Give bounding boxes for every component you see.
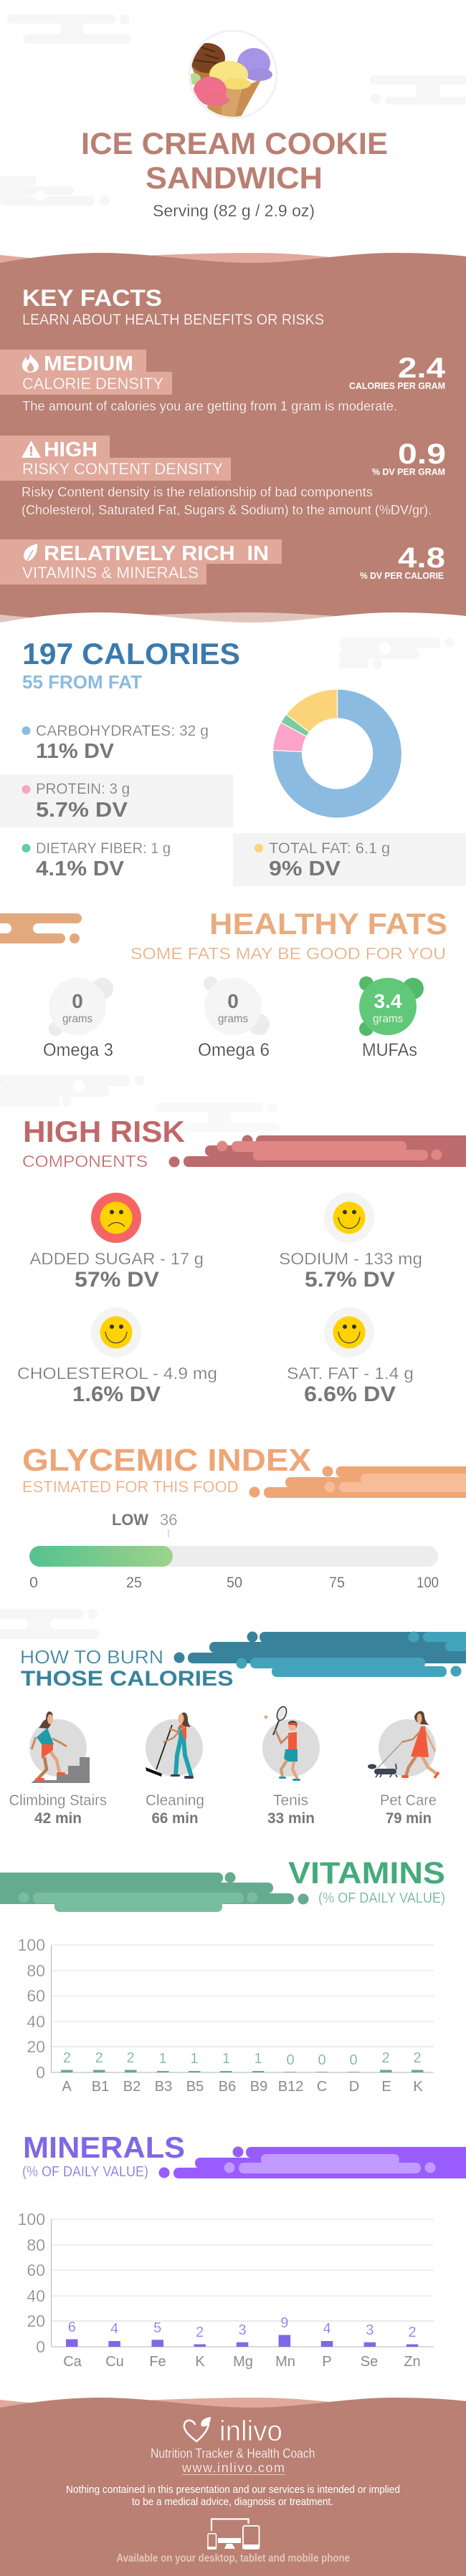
bar chart: minerals: Ca <box>63 2354 82 2370</box>
bar chart: vitamins: K <box>413 2079 423 2095</box>
bar chart: vitamins: 0 <box>349 2052 358 2068</box>
bar chart: minerals: 4 <box>110 2321 118 2337</box>
bar chart: minerals: 3 <box>238 2322 247 2338</box>
bar chart: vitamins <box>18 1936 434 2095</box>
icon: tennis player <box>264 1706 300 1781</box>
subheading: SOME FATS MAY BE GOOD FOR YOU <box>130 944 446 963</box>
stat: omega 6: grams <box>218 1013 248 1025</box>
fact: calorie density: CALORIE DENSITY <box>22 375 163 393</box>
bar chart: vitamins: 80 <box>27 1961 45 1980</box>
bar chart: vitamins: 1 <box>190 2051 199 2067</box>
fact: calorie density <box>0 350 446 413</box>
legend: protein <box>0 774 234 827</box>
gauge scale: 50 <box>227 1575 242 1591</box>
icon: warning triangle <box>22 441 41 458</box>
bar chart: minerals: 9 <box>280 2315 288 2331</box>
decorative cloud: centre <box>155 1102 280 1132</box>
fact: risky content density: HIGH <box>44 438 98 461</box>
disclaimer <box>66 2484 400 2508</box>
bar chart: vitamins: 1 <box>158 2051 167 2067</box>
icon: person sweeping <box>146 1713 194 1779</box>
legend: dietary fiber: 4.1% DV <box>36 857 125 880</box>
bar chart: vitamins: 20 <box>27 2037 45 2056</box>
activity: climbing stairs: 42 min <box>34 1810 82 1827</box>
disclaimer: to be a medical advice, diagnosis or treatment. <box>132 2496 333 2508</box>
item: sodium: 5.7% DV <box>305 1268 395 1292</box>
bar chart: minerals: K <box>195 2354 205 2370</box>
decorative cloud: left <box>0 1075 145 1107</box>
bar chart: vitamins: B5 <box>186 2079 204 2095</box>
icon: woman climbing stairs <box>32 1711 90 1783</box>
decorative stripes <box>0 1873 308 1912</box>
item: cholesterol: CHOLESTEROL - 4.9 mg <box>17 1364 217 1383</box>
stat: omega 3: Omega 3 <box>43 1040 113 1060</box>
panel: key facts <box>0 253 466 630</box>
legend: total fat: 9% DV <box>269 857 341 880</box>
bar chart: vitamins: 60 <box>27 1986 45 2005</box>
availability note: Available on your desktop, tablet and mobile phone <box>116 2552 350 2565</box>
serving size: Serving (82 g / 2.9 oz) <box>153 201 315 220</box>
panel: high risk components <box>17 1115 466 1406</box>
fact: risky content density: (Cholesterol, Saturated Fat, Sugars & Sodium) to the amount (%DV/gr). <box>22 503 432 517</box>
panel: glycemic index <box>22 1443 466 1591</box>
bar chart: minerals: 4 <box>323 2321 331 2337</box>
bar chart: vitamins: D <box>349 2079 359 2095</box>
bar chart: minerals: 5 <box>153 2320 161 2336</box>
item: added sugar: 57% DV <box>75 1268 159 1292</box>
icon: smiling face <box>324 1193 374 1243</box>
activity: cleaning: Cleaning <box>146 1792 204 1809</box>
item: saturated fat: 6.6% DV <box>304 1383 396 1406</box>
legend: protein: 5.7% DV <box>36 799 128 822</box>
decorative cloud: left <box>0 176 110 206</box>
item: cholesterol <box>17 1307 217 1406</box>
bar chart: vitamins: B6 <box>219 2079 236 2095</box>
bar chart: minerals: 3 <box>366 2322 374 2338</box>
legend: dietary fiber: DIETARY FIBER: 1 g <box>36 840 171 857</box>
stat: mufas: 3.4 <box>374 990 402 1012</box>
bar chart: vitamins: B2 <box>123 2079 141 2095</box>
subheading: (% OF DAILY VALUE) <box>318 1890 445 1906</box>
gauge value: LOW <box>112 1511 148 1529</box>
activity: pet care <box>368 1711 439 1827</box>
fact: risky content density: Risky Content density is the relationship of bad components <box>22 485 373 499</box>
bar chart: vitamins: B3 <box>155 2079 172 2095</box>
stat: mufas: grams <box>373 1013 403 1025</box>
bar chart: vitamins: E <box>381 2079 391 2095</box>
heading: glycemic index: GLYCEMIC INDEX <box>22 1443 311 1478</box>
bar chart: vitamins: 2 <box>413 2050 422 2066</box>
activity: tennis <box>262 1706 320 1827</box>
bar chart: vitamins: B9 <box>250 2079 267 2095</box>
website link: www.inlivo.com <box>181 2461 285 2475</box>
header section <box>0 14 466 220</box>
stat: mufas <box>359 976 424 1060</box>
bar chart: minerals: Fe <box>149 2354 166 2370</box>
decorative stripes <box>173 1632 466 1677</box>
heading: how to burn: HOW TO BURN <box>20 1646 163 1668</box>
decorative stripes <box>169 1135 466 1168</box>
stat: mufas: MUFAs <box>362 1040 417 1060</box>
bar chart: minerals <box>18 2210 434 2370</box>
bar chart: vitamins: 0 <box>36 2063 45 2082</box>
legend: dietary fiber <box>22 840 171 880</box>
decorative cloud: top left <box>7 14 131 44</box>
decorative stripes <box>159 2146 466 2178</box>
activity: climbing stairs <box>9 1711 107 1827</box>
gauge scale: 75 <box>329 1575 345 1591</box>
fact: risky content density: RISKY CONTENT DENSITY <box>22 460 223 478</box>
heading: minerals: MINERALS <box>23 2130 185 2164</box>
bar chart: minerals: 40 <box>27 2287 45 2305</box>
subheading: from fat: 55 FROM FAT <box>22 671 142 693</box>
stat: omega 3: grams <box>62 1013 92 1025</box>
item: added sugar: ADDED SUGAR - 17 g <box>30 1249 204 1268</box>
bar chart: vitamins: 100 <box>18 1936 45 1954</box>
stat: omega 3 <box>43 978 113 1060</box>
heading: calories: 197 CALORIES <box>22 637 240 671</box>
bar chart: minerals: Mn <box>275 2354 295 2370</box>
bar chart: vitamins: 40 <box>27 2012 45 2031</box>
heading: key facts: KEY FACTS <box>22 285 162 311</box>
stat: omega 6 <box>198 976 270 1060</box>
bar chart: vitamins: A <box>62 2079 72 2095</box>
tagline: Nutrition Tracker & Health Coach <box>151 2446 315 2461</box>
panel: footer <box>0 2398 466 2576</box>
activity: tennis: 33 min <box>267 1810 315 1827</box>
gauge value <box>112 1511 178 1537</box>
fact: calorie density: The amount of calories you are getting from 1 gram is moderate. <box>22 399 397 413</box>
bar chart: vitamins: C <box>317 2079 327 2095</box>
fact: calorie density: MEDIUM <box>44 352 133 375</box>
donut chart: calorie composition <box>272 689 401 818</box>
fact: risky content density: % DV PER GRAM <box>372 466 445 477</box>
panel: how to burn calories <box>9 1632 466 1827</box>
bar chart: minerals: 100 <box>18 2210 45 2229</box>
bar chart: vitamins: 2 <box>63 2050 71 2066</box>
icon: flame <box>22 353 39 373</box>
gauge scale: 100 <box>417 1575 439 1591</box>
fact: risky content density <box>0 436 446 517</box>
legend: carbohydrates: CARBOHYDRATES: 32 g <box>36 723 209 739</box>
stat: omega 3: 0 <box>72 990 83 1012</box>
heading: those calories: THOSE CALORIES <box>21 1667 234 1691</box>
fact: vitamins and minerals <box>0 539 445 585</box>
item: sodium <box>279 1193 422 1292</box>
bar chart: minerals: Mg <box>233 2354 253 2370</box>
activity: pet care: Pet Care <box>380 1792 437 1809</box>
bar chart: minerals: Cu <box>105 2354 124 2370</box>
activity: cleaning: 66 min <box>152 1810 198 1827</box>
legend: protein: PROTEIN: 3 g <box>36 781 130 797</box>
decorative cloud <box>339 638 455 669</box>
bar chart: minerals: 6 <box>68 2320 76 2335</box>
legend: total fat: TOTAL FAT: 6.1 g <box>269 840 390 857</box>
bar chart: vitamins: 1 <box>222 2051 230 2067</box>
bar chart: vitamins: B12 <box>278 2079 303 2095</box>
decorative stripes <box>249 1466 466 1498</box>
item: saturated fat <box>287 1307 414 1406</box>
item: added sugar <box>30 1193 204 1292</box>
activity: cleaning <box>146 1713 204 1827</box>
title <box>81 127 388 196</box>
activity: tennis: Tenis <box>273 1792 308 1809</box>
heading: high risk: HIGH RISK <box>23 1115 185 1148</box>
bar chart: vitamins: 2 <box>126 2050 135 2066</box>
legend: carbohydrates: 11% DV <box>36 740 115 763</box>
fact: vitamins and minerals: 4.8 <box>398 542 445 574</box>
bar chart: minerals: 20 <box>27 2312 45 2330</box>
gauge bar <box>29 1546 438 1567</box>
gauge scale: 0 <box>29 1575 38 1591</box>
gauge scale <box>29 1575 439 1591</box>
bar chart: vitamins: B1 <box>92 2079 109 2095</box>
subheading: LEARN ABOUT HEALTH BENEFITS OR RISKS <box>22 312 324 328</box>
activity: climbing stairs: Climbing Stairs <box>9 1792 107 1809</box>
fact: risky content density: 0.9 <box>398 438 446 470</box>
stat: omega 6: Omega 6 <box>198 1040 270 1060</box>
title: SANDWICH <box>146 161 323 196</box>
gauge value: 36 <box>160 1511 178 1529</box>
bar chart: vitamins: 2 <box>381 2050 390 2066</box>
gauge scale: 25 <box>126 1575 142 1591</box>
subheading: ESTIMATED FOR THIS FOOD <box>22 1478 238 1496</box>
decorative cloud: left <box>0 1609 100 1639</box>
decorative stripes <box>0 913 82 943</box>
icon: sad face <box>91 1193 141 1243</box>
bar chart: minerals: 80 <box>27 2236 45 2254</box>
bar chart: minerals: Se <box>361 2354 378 2370</box>
heading: healthy fats: HEALTHY FATS <box>209 907 447 941</box>
title: ICE CREAM COOKIE <box>81 127 388 161</box>
panel: vitamins <box>0 1856 445 2095</box>
item: saturated fat: SAT. FAT - 1.4 g <box>287 1364 414 1383</box>
item: sodium: SODIUM - 133 mg <box>279 1249 422 1268</box>
bar chart: minerals: 0 <box>36 2337 45 2356</box>
disclaimer: Nothing contained in this presentation and our services is intended or implied <box>66 2484 400 2496</box>
subheading: (% OF DAILY VALUE) <box>22 2164 148 2180</box>
stat: omega 6: 0 <box>227 990 239 1012</box>
legend: total fat <box>233 833 466 886</box>
panel: calories <box>0 637 466 886</box>
item: cholesterol: 1.6% DV <box>72 1383 161 1406</box>
fact: calorie density: CALORIES PER GRAM <box>349 380 445 391</box>
bar chart: vitamins: 0 <box>286 2052 295 2068</box>
bar chart: minerals: 2 <box>196 2325 204 2340</box>
fact: calorie density: 2.4 <box>398 352 446 384</box>
food image: ice cream cones <box>188 31 277 118</box>
activity: pet care: 79 min <box>386 1810 432 1827</box>
icon: woman walking dog <box>368 1711 439 1778</box>
decorative cloud: right <box>369 75 466 105</box>
subheading: components: COMPONENTS <box>22 1152 148 1171</box>
bar chart: vitamins: 0 <box>318 2052 326 2068</box>
bar chart: minerals: P <box>322 2354 332 2370</box>
logo: inlivo: inlivo <box>219 2416 282 2447</box>
icon: smiling face <box>91 1307 141 1357</box>
panel: healthy fats <box>0 907 447 1060</box>
bar chart: vitamins: 1 <box>254 2051 262 2067</box>
bar chart: minerals: Zn <box>404 2354 421 2370</box>
bar chart: minerals: 60 <box>27 2261 45 2279</box>
icon: devices <box>207 2519 260 2549</box>
fact: vitamins and minerals: RELATIVELY RICH IN <box>44 542 269 565</box>
bar chart: minerals: 2 <box>408 2325 417 2340</box>
legend: carbohydrates <box>22 723 209 763</box>
bar chart: vitamins: 2 <box>95 2050 103 2066</box>
fact: vitamins and minerals: VITAMINS & MINERALS <box>22 564 199 582</box>
icon: smiling face <box>324 1307 374 1357</box>
icon: leaf <box>24 544 37 561</box>
heading: vitamins: VITAMINS <box>288 1856 445 1890</box>
fact: vitamins and minerals: % DV PER CALORIE <box>360 570 444 581</box>
panel: minerals <box>18 2130 466 2370</box>
logo: inlivo <box>184 2416 282 2447</box>
